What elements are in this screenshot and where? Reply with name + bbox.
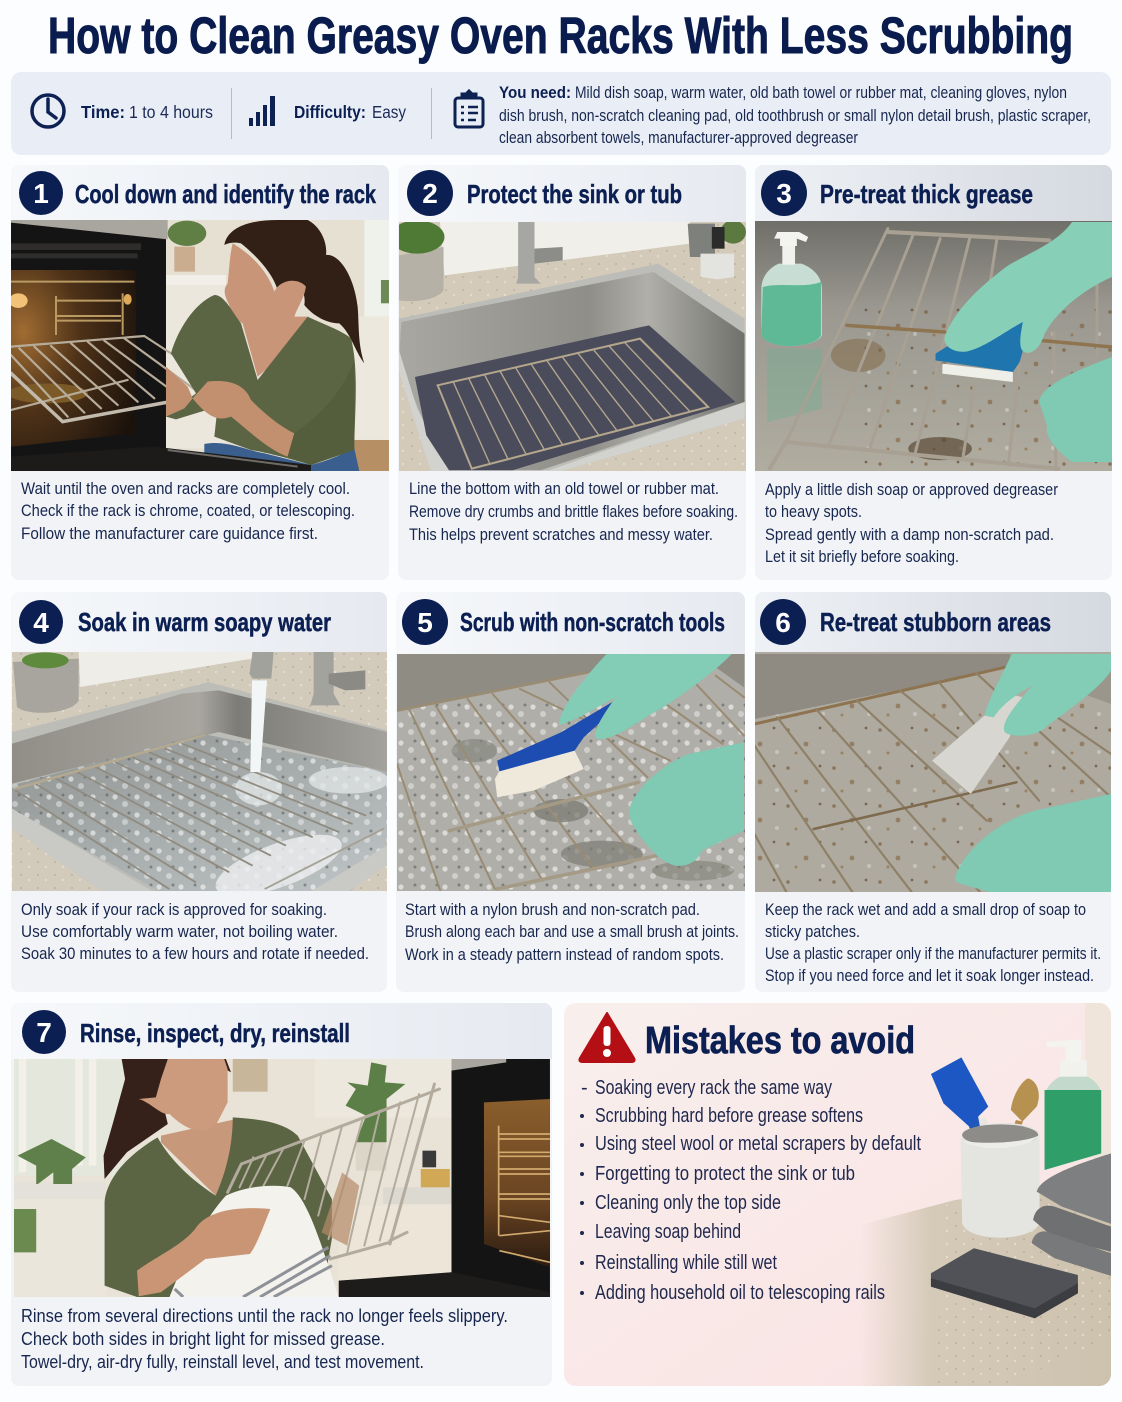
rack bars [770,229,1112,472]
step number 2 [407,170,453,216]
plastic scraper [932,694,1023,794]
blue brush [978,1118,988,1126]
time estimate: Time: [81,102,125,122]
white towel [170,1186,339,1297]
towels stack [1037,1153,1111,1224]
icon: clipboard [455,91,483,127]
nylon brush [495,751,584,797]
scouring pad [931,1248,1078,1318]
step 7 instructions: Rinse from several directions until the rack no longer feels slippery. [21,1306,508,1326]
step 1 instructions: Check if the rack is chrome, coated, or telescoping. [21,502,355,520]
step number 5 [402,599,448,645]
oven rack pulled out [11,334,194,424]
step number 1 [19,171,63,215]
step 4 instructions [21,901,369,963]
icon: clock [32,95,64,127]
heading: step 1: Cool down and identify the rack [75,179,376,209]
difficulty rating: Difficulty: [294,102,366,122]
step number 5: 5 [417,607,433,638]
photo: plastic scraper on stubborn spots [754,652,1111,892]
sponge [936,322,1023,372]
panel: step 2 [390,165,746,580]
step 4 instructions: Use comfortably warm water, not boiling water. [21,923,338,941]
photo: gloved hands spreading soap on rack [755,221,1112,472]
photo: rack soaking in soapy water [12,652,389,908]
step 3 instructions: to heavy spots. [765,503,862,521]
step 1 instructions [21,480,355,543]
supplies list [499,84,1091,147]
step 3 instructions: Apply a little dish soap or approved degreaser [765,481,1058,499]
info bar: time, difficulty, supplies [11,72,1111,155]
panel: step 5 [396,592,745,992]
step 1 instructions: Follow the manufacturer care guidance first. [21,525,318,543]
mistakes list: Forgetting to protect the sink or tub [595,1163,855,1185]
woman [104,1059,231,1179]
panel: step 3 [755,165,1112,580]
step number 6: 6 [775,607,791,638]
step 7 instructions: Towel-dry, air-dry fully, reinstall level, and test movement. [21,1352,424,1372]
step 2 instructions: Line the bottom with an old towel or rubber mat. [409,480,719,498]
panel: step 1 [8,165,389,580]
panel: step 4 [11,592,389,992]
mistakes list: Adding household oil to telescoping rails [595,1282,885,1304]
gloves [984,654,1111,736]
photo: woman removing rack from oven [8,220,389,471]
cup [961,1123,1040,1238]
heading: mistakes to avoid: Mistakes to avoid [645,1020,915,1062]
step number 4 [19,600,63,644]
panel: step 7 [11,1003,552,1386]
gloves [944,222,1112,353]
mistakes list: Cleaning only the top side [595,1192,781,1214]
step 2 instructions: This helps prevent scratches and messy water. [409,526,713,544]
heading: step 4: Soak in warm soapy water [78,607,331,637]
heading: step 7: Rinse, inspect, dry, reinstall [80,1018,350,1048]
step 5 instructions: Work in a steady pattern instead of random spots. [405,946,724,964]
supplies list: You need: [499,84,571,102]
step number 3: 3 [776,178,792,209]
step 2 instructions [409,480,738,544]
step 2 instructions: Remove dry crumbs and brittle flakes before soaking. [409,503,738,521]
step 7 instructions [21,1306,508,1372]
panel: mistakes to avoid [564,1003,1111,1390]
step 5 instructions: Start with a nylon brush and non-scratch pad. [405,901,700,919]
gloves [559,654,732,739]
step number 3 [761,170,807,216]
hand and forearm [137,1208,270,1296]
supplies list: clean absorbent towels, manufacturer-approved degreaser [499,129,858,147]
step 6 instructions [765,901,1101,985]
mistakes list: - [581,1077,588,1099]
difficulty rating: Easy [372,102,406,122]
step 5 instructions [405,901,739,964]
step number 7 [22,1010,66,1054]
rack bars [15,735,384,889]
step number 1: 1 [33,178,49,209]
soap bottle [1045,1075,1101,1170]
wooden brush [1014,1120,1023,1125]
photo: woman drying rack beside oven [14,1059,550,1297]
mistakes list [580,1077,921,1304]
step 3 instructions [765,481,1058,566]
mistakes list: Leaving soap behind [595,1221,741,1243]
icon: difficulty bars [249,96,275,126]
step number 4: 4 [33,607,49,638]
mistakes list: Using steel wool or metal scrapers by default [595,1133,921,1155]
photo: scrubbing with nylon brush [397,654,745,891]
photo: sink lined with towel [390,220,746,472]
step 4 instructions: Soak 30 minutes to a few hours and rotate if needed. [21,945,369,963]
step 7 instructions: Check both sides in bright light for missed grease. [21,1329,385,1349]
heading: step 2: Protect the sink or tub [467,179,682,209]
rack held up [228,1084,440,1259]
mistakes list: Soaking every rack the same way [595,1077,832,1099]
step 6 instructions: sticky patches. [765,923,860,941]
step number 6 [760,599,806,645]
step 1 instructions: Wait until the oven and racks are completely cool. [21,480,350,498]
mistakes list: Reinstalling while still wet [595,1252,777,1274]
time estimate: 1 to 4 hours [129,102,213,122]
photo: cleaning supplies on counter [860,1003,1111,1390]
mistakes list: Scrubbing hard before grease softens [595,1105,863,1127]
heading: step 3: Pre-treat thick grease [820,179,1033,209]
icon: warning triangle [579,1013,635,1062]
panel: step 6 [754,592,1111,992]
soap bottle [761,264,822,346]
step 6 instructions: Keep the rack wet and add a small drop of soap to [765,901,1086,919]
heading: step 5: Scrub with non-scratch tools [460,607,725,637]
step 3 instructions: Spread gently with a damp non-scratch pad. [765,526,1054,544]
step 4 instructions: Only soak if your rack is approved for soaking. [21,901,327,919]
step number 7: 7 [36,1017,52,1048]
step 5 instructions: Brush along each bar and use a small brush at joints. [405,923,739,941]
step number 2: 2 [422,178,438,209]
step 3 instructions: Let it sit briefly before soaking. [765,548,959,566]
heading: step 6: Re-treat stubborn areas [820,607,1051,637]
